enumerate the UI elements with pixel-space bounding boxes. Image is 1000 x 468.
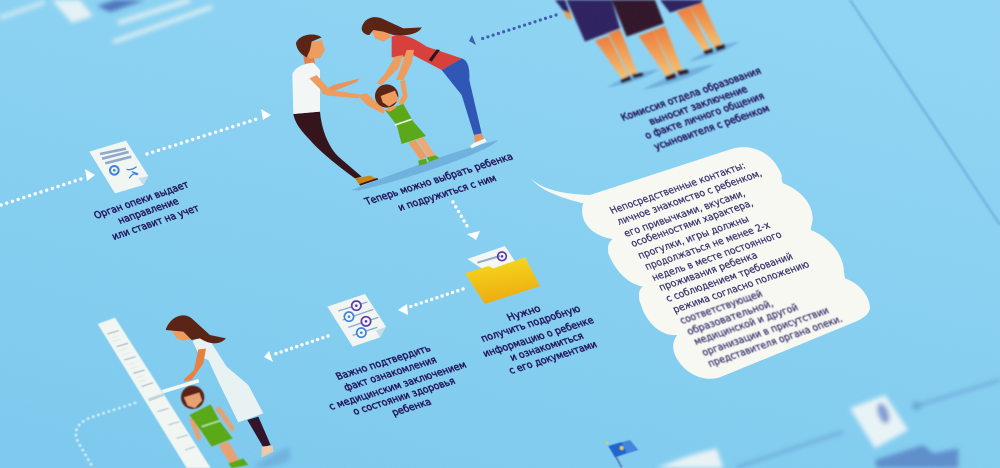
- caption: commission conclusion: Комиссия отдела образования: [619, 65, 763, 124]
- bubble shape: [531, 147, 870, 379]
- caption: get information: получить подробную: [479, 303, 583, 345]
- bubble text sharp lines: особенностями характера,: [629, 198, 755, 250]
- arrow: folder to medical document: [398, 289, 463, 315]
- caption: get information: с его документами: [507, 339, 599, 377]
- illustration: height ruler: [98, 318, 211, 468]
- bubble text blurred lines: образовательной,: [685, 298, 775, 338]
- measuring bar: [162, 379, 199, 393]
- bubble text sharp lines: с соблюдением требований: [664, 251, 795, 305]
- arrow: into guardianship document: [1, 169, 95, 205]
- woman: [362, 17, 487, 148]
- caption: medical conclusion: ребенка: [390, 396, 433, 419]
- caption: get information: Нужно: [505, 303, 543, 324]
- caption: get information: информацию о ребенке: [481, 315, 596, 360]
- illustration: couple with child: [292, 17, 498, 191]
- caption: get information: и ознакомиться: [508, 330, 586, 364]
- child: [181, 386, 248, 468]
- illustration: commission members: [555, 0, 740, 90]
- caption: commission conclusion: усыновителя с ребенком: [652, 103, 772, 153]
- bubble text sharp lines: продолжаться не менее 2-х: [643, 220, 772, 273]
- icon: yellow folder: [465, 246, 540, 304]
- bubble text sharp lines: прогулки, игры должны: [636, 213, 751, 262]
- bubble text sharp lines: режима согласно положению: [671, 259, 812, 316]
- bubble text blurred lines: [678, 288, 845, 370]
- bubble text blurred lines: представителя органа опеки.: [706, 313, 845, 370]
- arrow: medical document to doctor: [264, 336, 328, 362]
- caption: direction document: или ставит на учет: [110, 203, 201, 243]
- icon: flag: [605, 440, 638, 467]
- caption: choose child: Теперь можно выбрать ребенка: [362, 151, 515, 208]
- bubble text sharp lines: личное знакомство с ребенком,: [615, 168, 764, 228]
- doctor: [166, 315, 273, 457]
- speech bubble callout: [531, 147, 870, 379]
- arrow: document to couple: [147, 109, 271, 154]
- bubble text sharp lines: недель в месте постоянного: [650, 229, 784, 284]
- caption: get information: [479, 303, 599, 377]
- fold line at right: [850, 0, 1000, 225]
- caption: medical conclusion: факт ознакомления: [342, 354, 439, 394]
- floor shadow: [252, 447, 290, 468]
- caption: commission conclusion: [619, 65, 772, 153]
- caption: medical conclusion: Важно подтвердить: [334, 343, 433, 383]
- bubble text blurred lines: медицинской и другой: [692, 302, 800, 348]
- top-left blurred document and caption: [0, 0, 212, 42]
- dotted path from ruler: [76, 403, 135, 466]
- caption: direction document: направление: [116, 196, 181, 227]
- illustration: doctor measuring child: [148, 315, 290, 468]
- bubble text sharp lines: его привычками, вкусами,: [622, 188, 747, 240]
- arrow: couple to folder: [453, 202, 480, 240]
- bubble text sharp lines: проживания ребенка: [657, 250, 760, 294]
- icon: medical checklist document: [327, 294, 386, 347]
- caption: medical conclusion: о состоянии здоровья: [351, 375, 457, 418]
- man: [292, 35, 378, 186]
- caption: direction document: Орган опеки выдает: [92, 179, 191, 222]
- icon: direction document: [89, 141, 148, 193]
- bubble text blurred lines: соответствующей: [678, 288, 765, 327]
- caption: medical conclusion: с медицинским заключением: [327, 359, 469, 413]
- bottom blurred elements: [605, 380, 1000, 468]
- caption: commission conclusion: о факте личного общения: [643, 91, 767, 142]
- caption: choose child: и подружиться с ним: [396, 173, 499, 214]
- blurred shapes and connectors: [657, 380, 1000, 468]
- ground shadow: [352, 140, 498, 191]
- caption: direction document: [92, 179, 201, 243]
- arrow: commission to couple: [469, 15, 556, 45]
- bubble text sharp lines: Непосредственные контакты:: [608, 160, 748, 217]
- bubble text sharp lines: [608, 160, 812, 316]
- bubble text blurred lines: организации в присутствии: [700, 305, 831, 359]
- girl: [357, 80, 439, 166]
- caption: commission conclusion: выносит заключение: [647, 84, 750, 128]
